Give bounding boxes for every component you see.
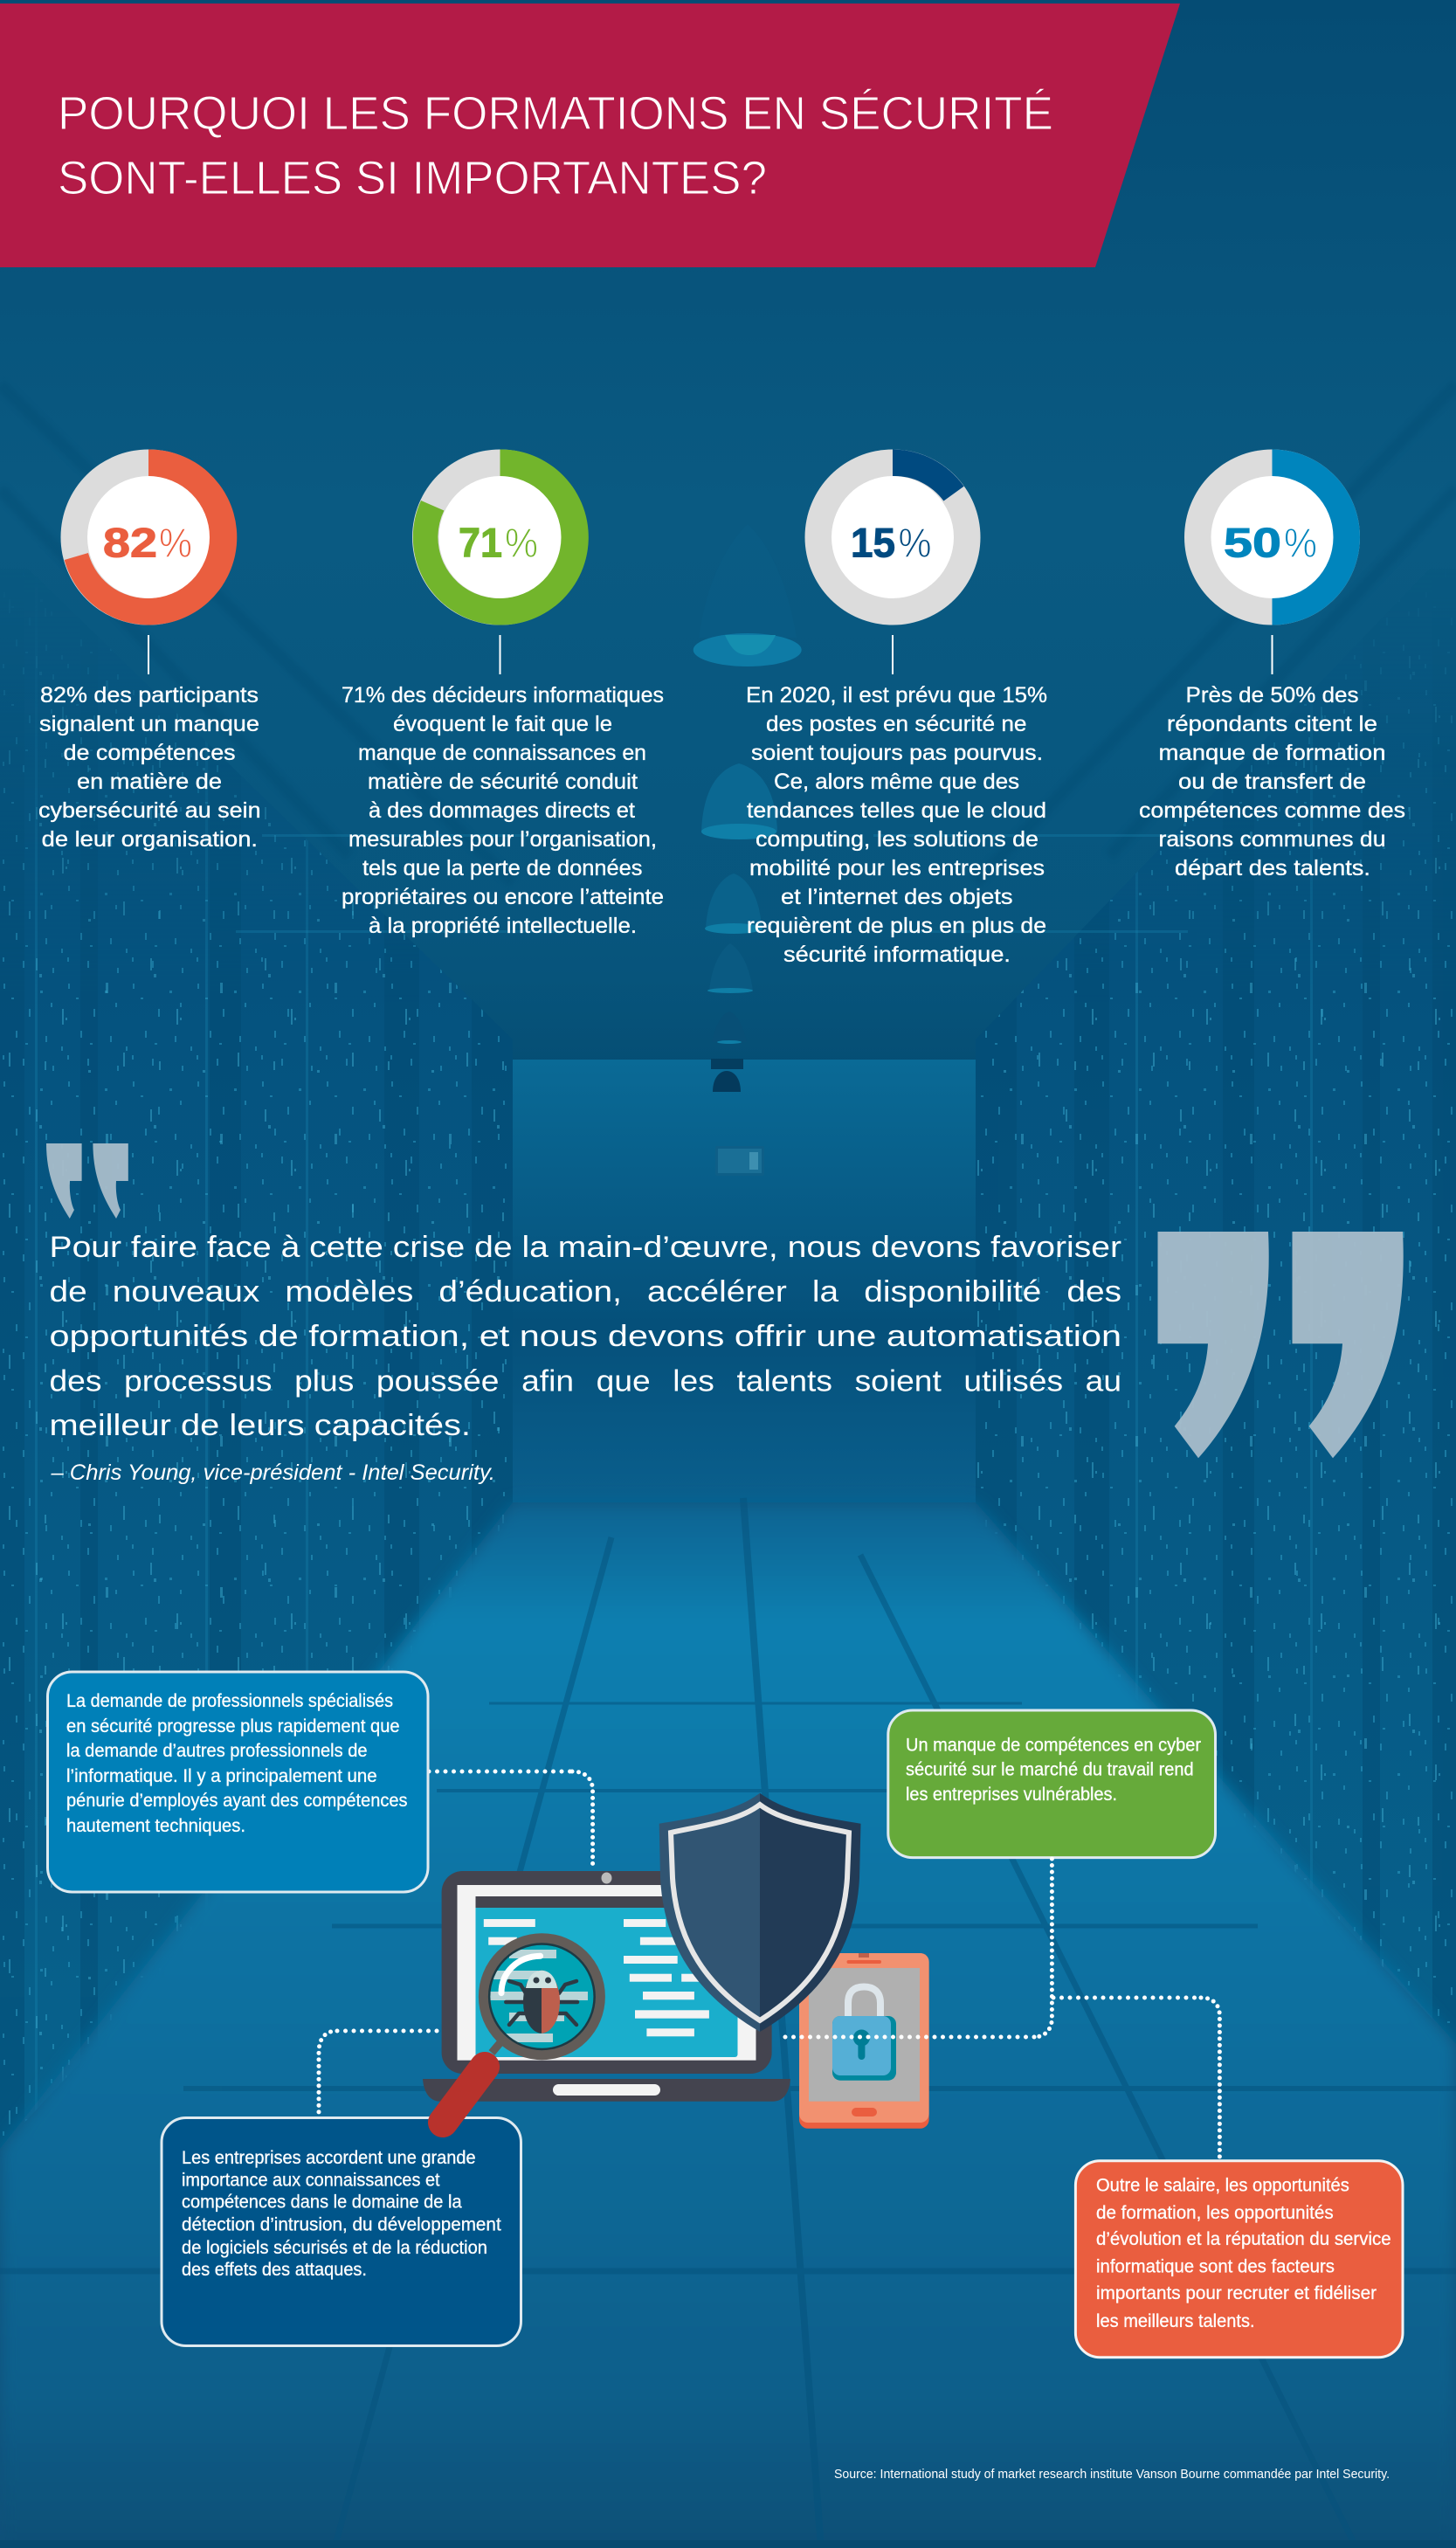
callout: green box: les entreprises vulnérables. bbox=[906, 1785, 1117, 1805]
text block 15% bbox=[746, 683, 1047, 967]
donut chart 50%: 50 bbox=[1224, 519, 1281, 566]
text block 15%: sécurité informatique. bbox=[783, 943, 1011, 967]
donut chart 71%: % bbox=[505, 519, 538, 566]
quote text: de nouveaux modèles d’éducation, accélérer la disponibilité des bbox=[49, 1275, 1121, 1309]
callout: dark blue box: Les entreprises accordent une grande bbox=[182, 2148, 476, 2168]
quote text bbox=[49, 1231, 1121, 1442]
callout: orange box bbox=[1075, 2161, 1403, 2358]
text block 82%: 82% des participants bbox=[40, 683, 259, 708]
text block 50%: répondants citent le bbox=[1167, 712, 1377, 736]
text block 82% bbox=[38, 683, 261, 852]
quote text: meilleur de leurs capacités. bbox=[49, 1409, 471, 1442]
callout: green box: Un manque de compétences en cyber bbox=[906, 1735, 1201, 1756]
illustration: magnifying glass with bug bbox=[443, 1933, 605, 2123]
callout: orange box: les meilleurs talents. bbox=[1096, 2311, 1255, 2331]
text block 15%: En 2020, il est prévu que 15% bbox=[746, 683, 1047, 708]
callout: blue box: en sécurité progresse plus rapidement que bbox=[66, 1716, 400, 1737]
text block 71%: propriétaires ou encore l’atteinte bbox=[342, 885, 664, 909]
donut chart 82%: % bbox=[159, 519, 192, 566]
text block 15%: requièrent de plus en plus de bbox=[747, 914, 1046, 938]
text block 50%: ou de transfert de bbox=[1178, 770, 1366, 794]
callout: orange box: de formation, les opportunités bbox=[1096, 2203, 1334, 2223]
text block 82%: de compétences bbox=[64, 741, 236, 765]
text block 50%: manque de formation bbox=[1158, 741, 1385, 765]
illustration: shield bbox=[659, 1793, 861, 2032]
text block 15%: des postes en sécurité ne bbox=[766, 712, 1027, 736]
dotted connector: green box to junction bbox=[1034, 1859, 1052, 2037]
callout: orange box: Outre le salaire, les opportunités bbox=[1096, 2176, 1349, 2196]
lamps bbox=[693, 524, 802, 1092]
callout: dark blue box: des effets des attaques. bbox=[182, 2260, 367, 2280]
text block 71%: à des dommages directs et bbox=[369, 798, 635, 823]
text block 82%: signalent un manque bbox=[39, 712, 259, 736]
text block 15%: computing, les solutions de bbox=[756, 827, 1039, 852]
dotted connector: blue box to laptop bbox=[429, 1771, 593, 1869]
stat panel: 15% bbox=[746, 449, 1047, 967]
callout: orange box: informatique sont des facteurs bbox=[1096, 2257, 1335, 2276]
text block 15%: Ce, alors même que des bbox=[774, 770, 1019, 794]
text block 71%: manque de connaissances en bbox=[358, 741, 646, 765]
donut chart 82% bbox=[61, 449, 237, 625]
text block 15%: et l’internet des objets bbox=[781, 885, 1013, 909]
title banner bbox=[0, 3, 1180, 267]
callout: blue box: pénurie d’employés ayant des compétences bbox=[66, 1791, 407, 1811]
text block 82%: en matière de bbox=[77, 770, 222, 794]
quote text: opportunités de formation, et nous devons offrir une automatisation bbox=[49, 1320, 1121, 1353]
text block 50% bbox=[1139, 683, 1405, 880]
text block 71%: à la propriété intellectuelle. bbox=[369, 914, 637, 938]
text block 50%: raisons communes du bbox=[1158, 827, 1385, 852]
callout: dark blue box: importance aux connaissances et bbox=[182, 2170, 440, 2190]
stat panel: 71% bbox=[342, 449, 664, 938]
donut chart 15%: 15 bbox=[851, 519, 895, 566]
title: POURQUOI LES FORMATIONS EN SÉCURITÉ bbox=[58, 87, 1053, 140]
callout: green box bbox=[888, 1710, 1216, 1858]
text block 71%: tels que la perte de données bbox=[362, 856, 643, 880]
text block 82%: de leur organisation. bbox=[42, 827, 258, 852]
callout: green box: sécurité sur le marché du travail rend bbox=[906, 1759, 1194, 1780]
donut chart 15%: % bbox=[898, 519, 931, 566]
quote attribution: – Chris Young, vice-président - Intel Security. bbox=[50, 1460, 495, 1485]
callout: blue box: La demande de professionnels spécialisés bbox=[66, 1691, 393, 1711]
callout: blue box: l’informatique. Il y a principalement une bbox=[66, 1766, 377, 1786]
quote text: des processus plus poussée afin que les talents soient utilisés au bbox=[49, 1364, 1121, 1398]
callout: dark blue box: de logiciels sécurisés et de la réduction bbox=[182, 2238, 487, 2258]
dotted connector: junction to orange box bbox=[1053, 1998, 1219, 2160]
callout: blue box bbox=[47, 1672, 428, 1892]
text block 71%: 71% des décideurs informatiques bbox=[342, 683, 664, 708]
callout: orange box: importants pour recruter et fidéliser bbox=[1096, 2283, 1377, 2303]
text block 50%: compétences comme des bbox=[1139, 798, 1405, 823]
stat panel: 50% bbox=[1139, 449, 1405, 880]
text block 15%: mobilité pour les entreprises bbox=[749, 856, 1045, 880]
text block 15%: soient toujours pas pourvus. bbox=[751, 741, 1043, 765]
text block 50%: Près de 50% des bbox=[1186, 683, 1359, 708]
callout: dark blue box: compétences dans le domaine de la bbox=[182, 2192, 462, 2212]
dotted connector: junction to phone bbox=[778, 2035, 1034, 2039]
donut chart 71%: 71 bbox=[459, 519, 502, 566]
illustration: phone with padlock bbox=[799, 1953, 929, 2129]
text block 71% bbox=[342, 683, 664, 938]
callout: dark blue box: détection d’intrusion, du développement bbox=[182, 2215, 501, 2235]
stat panel: 82% bbox=[38, 449, 261, 852]
text block 71%: matière de sécurité conduit bbox=[368, 770, 638, 794]
callout: blue box: hautement techniques. bbox=[66, 1816, 245, 1836]
text block 71%: mesurables pour l’organisation, bbox=[348, 827, 657, 852]
icon: closing quotation mark bbox=[1158, 1232, 1404, 1458]
donut chart 15% bbox=[805, 449, 980, 625]
text block 71%: évoquent le fait que le bbox=[393, 712, 612, 736]
title bbox=[58, 87, 1053, 204]
source note: Source: International study of market research institute Vanson Bourne commandée par Intel Security. bbox=[834, 2467, 1390, 2482]
dotted connector: dark box to laptop bbox=[319, 2031, 437, 2117]
icon: opening quotation mark bbox=[46, 1143, 128, 1219]
donut chart 82%: 82 bbox=[103, 519, 157, 566]
text block 50%: départ des talents. bbox=[1175, 856, 1370, 880]
donut chart 50%: % bbox=[1284, 519, 1317, 566]
text block 82%: cybersécurité au sein bbox=[38, 798, 261, 823]
callout: blue box: la demande d’autres professionnels de bbox=[66, 1741, 367, 1761]
callout: dark blue box bbox=[162, 2117, 521, 2346]
quote text: Pour faire face à cette crise de la main-d’œuvre, nous devons favoriser bbox=[49, 1231, 1121, 1264]
callout: orange box: d’évolution et la réputation du service bbox=[1096, 2229, 1391, 2249]
title: SONT-ELLES SI IMPORTANTES? bbox=[58, 152, 767, 204]
illustration: laptop bbox=[423, 1871, 790, 2102]
text block 15%: tendances telles que le cloud bbox=[747, 798, 1046, 823]
exit sign bbox=[715, 1146, 764, 1176]
donut chart 50% bbox=[1184, 449, 1360, 625]
donut chart 71% bbox=[412, 449, 589, 625]
